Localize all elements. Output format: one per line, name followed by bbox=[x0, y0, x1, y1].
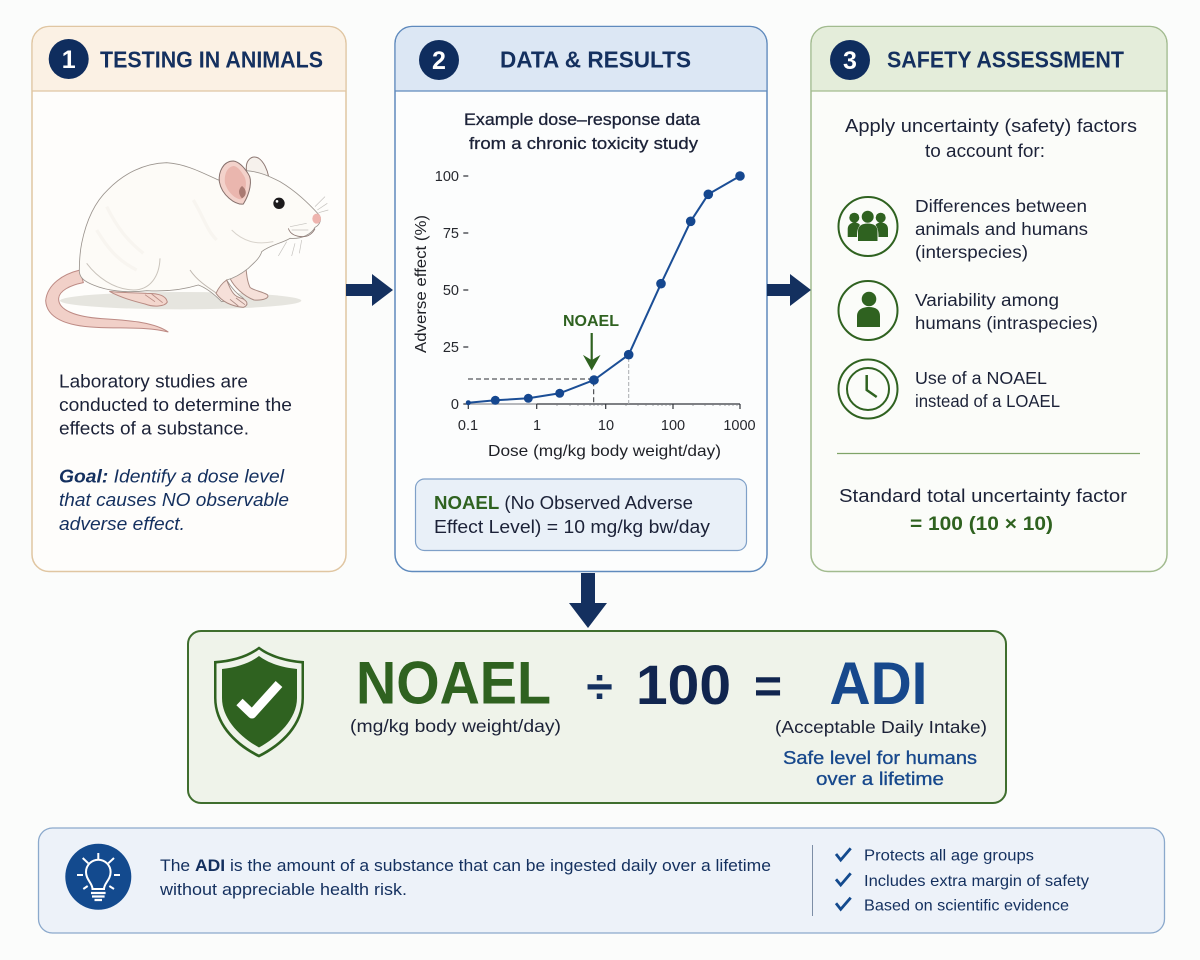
formula: divide by 100: = bbox=[754, 660, 782, 714]
panel 3 header: SAFETY ASSESSMENT bbox=[887, 46, 1124, 72]
panel 2 header: 2 bbox=[432, 47, 446, 75]
icon: clock bbox=[838, 360, 898, 418]
formula: divide by 100 bbox=[586, 653, 782, 716]
line chart: dose-response curve bbox=[413, 169, 756, 460]
text: uncertainty factors intro bbox=[845, 116, 1137, 161]
text: NOAEL instead of LOAEL: Use of a NOAEL bbox=[915, 368, 1047, 388]
checklist: benefits: Protects all age groups bbox=[864, 848, 1034, 865]
x axis tick labels: 1 bbox=[533, 418, 541, 434]
formula: ADI: Safe level for humans bbox=[783, 748, 977, 768]
panel 3 header bbox=[811, 27, 1167, 91]
NOAEL label and arrow: NOAEL bbox=[563, 313, 619, 330]
NOAEL and LOAEL guide lines bbox=[468, 358, 629, 404]
text: goal statement: that causes NO observable bbox=[59, 490, 289, 510]
x axis tick labels bbox=[458, 418, 756, 434]
x axis tick labels: 10 bbox=[598, 418, 614, 434]
icon: group of people bbox=[838, 197, 898, 256]
panel: data and results bbox=[395, 26, 767, 572]
x axis tick labels: 0.1 bbox=[458, 418, 478, 434]
text: ADI definition: without appreciable health risk. bbox=[159, 881, 407, 899]
checklist: benefits: Based on scientific evidence bbox=[864, 898, 1069, 914]
checklist: benefits: Includes extra margin of safety bbox=[864, 873, 1089, 890]
text: NOAEL instead of LOAEL bbox=[915, 368, 1060, 411]
text: laboratory studies description: Laboratory studies are bbox=[59, 372, 248, 392]
y axis tick labels bbox=[435, 169, 459, 413]
formula: ADI: over a lifetime bbox=[816, 769, 944, 789]
panel: testing in animals bbox=[32, 26, 346, 572]
text: standard total uncertainty factor bbox=[839, 486, 1127, 535]
formula: NOAEL: NOAEL bbox=[356, 650, 551, 716]
dose-response curve bbox=[468, 176, 740, 403]
text: goal statement: Goal: Identify a dose level bbox=[59, 466, 285, 486]
text: goal statement: adverse effect. bbox=[59, 514, 185, 534]
data points bbox=[466, 171, 745, 405]
text: NOAEL instead of LOAEL: instead of a LOAEL bbox=[915, 391, 1060, 411]
formula: ADI bbox=[775, 650, 987, 789]
axes bbox=[463, 176, 740, 409]
text: goal statement bbox=[59, 466, 289, 534]
text: uncertainty factors intro: to account for: bbox=[925, 141, 1045, 161]
chart title: from a chronic toxicity study bbox=[469, 134, 699, 153]
formula: ADI: (Acceptable Daily Intake) bbox=[775, 717, 987, 737]
panel: safety assessment bbox=[811, 26, 1167, 572]
text: interspecies differences bbox=[915, 196, 1088, 262]
arrow: panel 2 to panel 3 bbox=[767, 274, 811, 306]
NOAEL label and arrow bbox=[563, 313, 619, 369]
formula: ADI: ADI bbox=[830, 650, 928, 717]
panel 2 header: DATA & RESULTS bbox=[500, 46, 691, 72]
formula: divide by 100: ÷ bbox=[586, 661, 613, 714]
arrow: panel 2 down to formula bbox=[569, 573, 607, 628]
x axis tick labels: 100 bbox=[661, 418, 685, 434]
illustration: white laboratory rat bbox=[46, 157, 328, 332]
text: interspecies differences: animals and humans bbox=[915, 219, 1088, 239]
text: laboratory studies description: conducted to determine the bbox=[59, 395, 292, 415]
y axis title: Adverse effect (%) bbox=[413, 215, 430, 353]
text: ADI definition: The ADI is the amount of a substance that can be ingested daily over a lifetime bbox=[160, 857, 771, 875]
y axis tick labels: 75 bbox=[443, 226, 459, 242]
arrow: panel 1 to panel 2 bbox=[346, 274, 393, 306]
formula: divide by 100: 100 bbox=[636, 653, 731, 716]
text: laboratory studies description bbox=[59, 372, 292, 438]
callout: NOAEL definition bbox=[416, 479, 746, 550]
icon: shield with check mark bbox=[214, 646, 304, 758]
text: intraspecies variability: Variability among bbox=[915, 290, 1059, 310]
panel 2 header bbox=[395, 27, 767, 91]
panel 1 header bbox=[32, 27, 346, 91]
panel 3 header: 3 bbox=[843, 47, 857, 75]
panel: ADI definition footer bbox=[38, 828, 1164, 933]
y axis tick labels: 100 bbox=[435, 169, 459, 185]
x axis tick labels: 1000 bbox=[723, 418, 756, 434]
icon: single person bbox=[838, 281, 898, 340]
formula: NOAEL: (mg/kg body weight/day) bbox=[350, 716, 561, 736]
y axis tick labels: 25 bbox=[443, 340, 459, 356]
text: laboratory studies description: effects of a substance. bbox=[59, 418, 249, 438]
panel: ADI formula bbox=[188, 631, 1006, 803]
chart title bbox=[464, 110, 701, 153]
callout: NOAEL definition: NOAEL (No Observed Adverse bbox=[434, 493, 693, 513]
text: intraspecies variability bbox=[915, 290, 1098, 333]
x axis title: Dose (mg/kg body weight/day) bbox=[488, 443, 721, 460]
checklist: benefits bbox=[836, 848, 1089, 914]
text: standard total uncertainty factor: Standard total uncertainty factor bbox=[839, 486, 1127, 506]
text: intraspecies variability: humans (intraspecies) bbox=[915, 313, 1098, 333]
panel 1 header: TESTING IN ANIMALS bbox=[100, 46, 323, 72]
text: uncertainty factors intro: Apply uncertainty (safety) factors bbox=[845, 116, 1137, 136]
text: interspecies differences: Differences between bbox=[915, 196, 1087, 216]
text: interspecies differences: (interspecies) bbox=[915, 242, 1028, 262]
chart title: Example dose–response data bbox=[464, 110, 701, 129]
text: ADI definition bbox=[159, 857, 771, 899]
panel 1 header: 1 bbox=[62, 46, 76, 74]
icon: light bulb bbox=[65, 844, 131, 910]
y axis tick labels: 0 bbox=[451, 397, 459, 413]
text: standard total uncertainty factor: = 100 (10 × 10) bbox=[910, 513, 1053, 535]
callout: NOAEL definition: Effect Level) = 10 mg/kg bw/day bbox=[434, 517, 710, 537]
y axis tick labels: 50 bbox=[443, 283, 459, 299]
